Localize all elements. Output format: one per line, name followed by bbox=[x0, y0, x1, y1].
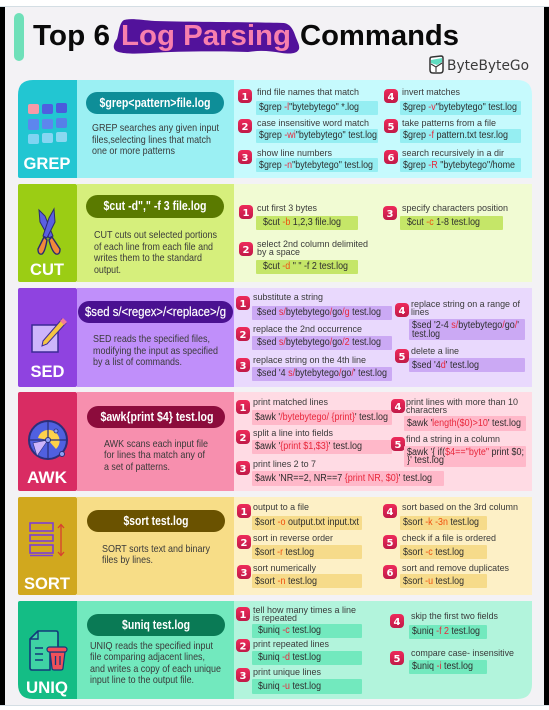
label: CUT: CUT bbox=[30, 260, 65, 279]
description bbox=[90, 641, 221, 686]
item 3 bbox=[383, 202, 508, 230]
item 3: 3 bbox=[240, 361, 247, 372]
item 4: $sort -k -3n test.log bbox=[403, 517, 479, 528]
item 4: $grep -v"bytebytego" test.log bbox=[403, 102, 517, 113]
item 4 bbox=[384, 86, 521, 115]
item 4 bbox=[395, 298, 525, 340]
command pill: $sort test.log bbox=[124, 514, 188, 528]
item 3: show line numbers bbox=[257, 147, 332, 158]
item 1: 1 bbox=[243, 208, 250, 219]
item 4: 4 bbox=[399, 306, 406, 317]
item 3: 3 bbox=[240, 464, 247, 475]
item 1: 1 bbox=[241, 507, 248, 518]
description bbox=[104, 439, 208, 473]
item 4: replace string on a range of bbox=[411, 298, 520, 309]
item 4 bbox=[391, 396, 526, 431]
item 5: 5 bbox=[394, 654, 401, 665]
command pill bbox=[86, 195, 224, 218]
command pill: $grep<pattern>file.log bbox=[100, 96, 210, 110]
item 1: is repeated bbox=[253, 612, 297, 623]
item 6: search recursively in a dir bbox=[402, 147, 504, 158]
item 6: sort and remove duplicates bbox=[402, 562, 509, 573]
item 5: find a string in a column bbox=[406, 433, 500, 444]
item 2: case insensitive word match bbox=[257, 117, 369, 128]
item 3: print lines 2 to 7 bbox=[253, 458, 316, 469]
item 2: 2 bbox=[240, 433, 247, 444]
item 5 bbox=[384, 117, 521, 143]
description: GREP searches any given input bbox=[92, 123, 219, 134]
item 5: $sort -c test.log bbox=[403, 547, 464, 558]
item 1: $uniq -c test.log bbox=[258, 625, 321, 636]
item 4: 4 bbox=[387, 507, 394, 518]
item 2 bbox=[236, 638, 362, 665]
icon: file and trash bin bbox=[30, 631, 67, 670]
item 3: print unique lines bbox=[253, 666, 321, 677]
description: by a list of commands. bbox=[93, 357, 182, 368]
item 3 bbox=[236, 354, 392, 381]
label: UNIQ: UNIQ bbox=[26, 678, 68, 697]
panel: SED bbox=[18, 288, 532, 387]
item 2 bbox=[236, 427, 392, 454]
item 1: 1 bbox=[242, 92, 249, 103]
item 5 bbox=[395, 345, 525, 372]
command pill: $sed s/<regex>/<replace>/g bbox=[85, 305, 226, 319]
item 6: $grep -R "bytebytego"/home bbox=[403, 160, 515, 171]
item 1: cut first 3 bytes bbox=[257, 202, 317, 213]
item 4: $sed '2-4 s/bytebytego/go/' bbox=[412, 320, 519, 331]
item 2: 2 bbox=[241, 538, 248, 549]
item 6 bbox=[383, 562, 509, 588]
icon: grid of cubes bbox=[28, 103, 67, 144]
item 3: $uniq -u test.log bbox=[258, 681, 321, 692]
description: files,selecting lines that match bbox=[92, 135, 211, 146]
item 2: $sed s/bytebytego/go/2 test.log bbox=[257, 337, 381, 348]
item 2: $sort -r test.log bbox=[255, 547, 314, 558]
title bbox=[33, 19, 459, 54]
item 1: $sed s/bytebytego/go/g test.log bbox=[257, 307, 381, 318]
item 1: 1 bbox=[240, 610, 247, 621]
item 5 bbox=[390, 647, 514, 674]
label: SORT: SORT bbox=[24, 574, 71, 593]
item 3: $cut -c 1-8 test.log bbox=[407, 217, 480, 228]
item 2: 2 bbox=[240, 330, 247, 341]
icon: sort bars and arrow bbox=[30, 523, 64, 556]
description: file comparing adjacent lines, bbox=[90, 652, 205, 663]
title: Top 6 bbox=[33, 20, 110, 52]
item 1 bbox=[236, 396, 392, 425]
icon: radar bbox=[29, 421, 67, 459]
item 6: 6 bbox=[388, 153, 395, 164]
panel: SORT bbox=[18, 497, 532, 595]
item 2: 2 bbox=[243, 245, 250, 256]
item 2: $uniq -d test.log bbox=[258, 652, 321, 663]
item 2 bbox=[239, 238, 368, 274]
item 6: 6 bbox=[387, 568, 394, 579]
command pill bbox=[86, 92, 224, 114]
item 4: lines bbox=[411, 306, 429, 317]
item 4: test.log bbox=[412, 329, 440, 340]
item 3: $grep -n"bytebytego" test.log bbox=[259, 160, 373, 171]
item 1 bbox=[238, 86, 378, 115]
command pill bbox=[87, 614, 225, 636]
item 3: 3 bbox=[242, 153, 249, 164]
description: SORT sorts text and binary bbox=[102, 544, 211, 555]
description: UNIQ reads the specified input bbox=[90, 641, 213, 652]
label: SED: SED bbox=[30, 362, 64, 381]
icon: scissors bbox=[38, 209, 60, 254]
item 1: $awk '/bytebytego/ {print}' test.log bbox=[255, 412, 388, 423]
accent bar bbox=[14, 13, 24, 61]
description: input line to the output file. bbox=[90, 675, 194, 686]
item 3: $sed '4 s/bytebytego/go/' test.log bbox=[257, 368, 387, 379]
item 2 bbox=[236, 323, 392, 350]
item 1 bbox=[236, 291, 392, 320]
item 2: by a space bbox=[257, 246, 300, 257]
description: one or more patterns bbox=[92, 146, 175, 157]
item 3: $awk 'NR==2, NR==7 {print NR, $0}' test.log bbox=[255, 473, 432, 484]
item 3 bbox=[238, 147, 378, 172]
item 4: 4 bbox=[395, 402, 402, 413]
description: a set of patterns. bbox=[104, 462, 170, 473]
item 3: specify characters position bbox=[402, 202, 508, 213]
item 4: $uniq -f 2 test.log bbox=[412, 626, 480, 637]
description: AWK scans each input file bbox=[104, 439, 208, 450]
panel: CUT bbox=[18, 184, 532, 282]
item 4: sort based on the 3rd column bbox=[402, 501, 518, 512]
item 2 bbox=[237, 532, 362, 559]
item 5: $grep -f pattern.txt tesr.log bbox=[403, 130, 508, 141]
item 5: 5 bbox=[388, 122, 395, 133]
description bbox=[93, 230, 217, 276]
item 3: 3 bbox=[240, 671, 247, 682]
item 4: 4 bbox=[388, 92, 395, 103]
command pill bbox=[78, 301, 233, 323]
item 1 bbox=[236, 604, 362, 638]
item 1: tell how many times a line bbox=[253, 604, 356, 615]
item 4: skip the first two fields bbox=[411, 610, 498, 621]
item 5: $uniq -i test.log bbox=[412, 661, 473, 672]
item 2: sort in reverse order bbox=[253, 532, 333, 543]
item 3: replace string on the 4th line bbox=[253, 354, 366, 365]
item 4: 4 bbox=[394, 617, 401, 628]
item 5: $sed '4d' test.log bbox=[412, 360, 479, 371]
command pill bbox=[87, 406, 225, 428]
item 1 bbox=[237, 501, 362, 530]
logo: ByteByteGo: ByteByteGo bbox=[447, 58, 529, 74]
description: files by lines. bbox=[102, 555, 153, 566]
description bbox=[93, 334, 218, 368]
title: Commands bbox=[300, 20, 459, 52]
item 1: find file names that match bbox=[257, 86, 359, 97]
item 5 bbox=[391, 433, 526, 467]
item 5: take patterns from a file bbox=[402, 117, 496, 128]
item 2: 2 bbox=[242, 122, 249, 133]
description: output. bbox=[94, 265, 121, 276]
item 4: $awk 'length($0)>10' test.log bbox=[407, 418, 521, 429]
description: and writes a copy of each unique bbox=[90, 664, 221, 675]
item 2: 2 bbox=[240, 641, 247, 652]
description: for lines tha match any of bbox=[104, 450, 205, 461]
item 2: $grep -wi"bytebytego" test.log bbox=[259, 130, 377, 141]
item 5: check if a file is ordered bbox=[402, 532, 496, 543]
item 3: $sort -n test.log bbox=[255, 576, 317, 587]
item 1: $cut -b 1,2,3 file.log bbox=[263, 217, 341, 228]
item 1: 1 bbox=[240, 403, 247, 414]
icon: pencil on note bbox=[32, 318, 67, 352]
item 1: 1 bbox=[240, 299, 247, 310]
label: AWK: AWK bbox=[27, 468, 68, 487]
item 2: $awk '{print $1,$3}' test.log bbox=[255, 441, 362, 452]
description: writes them to the standard bbox=[93, 253, 202, 264]
panel: GREP bbox=[18, 80, 532, 178]
item 5: 5 bbox=[399, 352, 406, 363]
item 2: replace the 2nd occurrence bbox=[253, 323, 362, 334]
description: of each line from each file and bbox=[94, 242, 213, 253]
description: CUT cuts out selected portions bbox=[94, 230, 217, 241]
item 2: split a line into fields bbox=[253, 427, 333, 438]
item 5: 5 bbox=[395, 440, 402, 451]
item 3: 3 bbox=[387, 209, 394, 220]
description bbox=[92, 123, 219, 157]
label: GREP: GREP bbox=[24, 154, 70, 173]
item 1: $grep -l"bytebytego" *.log bbox=[259, 102, 359, 113]
item 3 bbox=[236, 458, 444, 486]
item 4: print lines with more than 10 bbox=[406, 396, 518, 407]
command pill bbox=[87, 510, 225, 532]
item 4 bbox=[383, 501, 518, 530]
item 2: $cut -d " " -f 2 test.log bbox=[263, 261, 348, 272]
description bbox=[102, 544, 211, 566]
panel: UNIQ bbox=[18, 601, 532, 699]
item 1: $sort -o output.txt input.txt bbox=[255, 517, 359, 528]
command pill: $uniq test.log bbox=[122, 618, 190, 632]
panel: AWK bbox=[18, 392, 532, 491]
item 1 bbox=[239, 202, 358, 230]
item 3: sort numerically bbox=[253, 562, 316, 573]
item 6 bbox=[384, 147, 521, 172]
item 1: print matched lines bbox=[253, 396, 328, 407]
item 3: 3 bbox=[241, 568, 248, 579]
item 5: delete a line bbox=[411, 345, 459, 356]
item 5: $awk '{ if($4=="byte" print $0; bbox=[407, 447, 524, 458]
description: SED reads the specified files, bbox=[93, 334, 210, 345]
item 2 bbox=[238, 117, 378, 143]
title: Log Parsing bbox=[121, 20, 291, 52]
item 1: substitute a string bbox=[253, 291, 323, 302]
item 4 bbox=[390, 610, 498, 639]
item 5: }' test.log bbox=[407, 455, 444, 466]
item 2: print repeated lines bbox=[253, 638, 329, 649]
description: modifying the input as specified bbox=[93, 346, 218, 357]
item 3 bbox=[236, 666, 362, 694]
item 5 bbox=[383, 532, 496, 559]
item 5: 5 bbox=[387, 538, 394, 549]
command pill: $awk{print $4} test.log bbox=[100, 410, 214, 424]
command pill: $cut -d"," -f 3 file.log bbox=[104, 199, 206, 213]
item 2: select 2nd column delimited bbox=[257, 238, 368, 249]
item 5: compare case- insensitive bbox=[411, 647, 514, 658]
item 6: $sort -u test.log bbox=[403, 576, 464, 587]
item 1: output to a file bbox=[253, 501, 309, 512]
item 4: characters bbox=[406, 404, 447, 415]
item 4: invert matches bbox=[402, 86, 460, 97]
item 3 bbox=[237, 562, 362, 588]
